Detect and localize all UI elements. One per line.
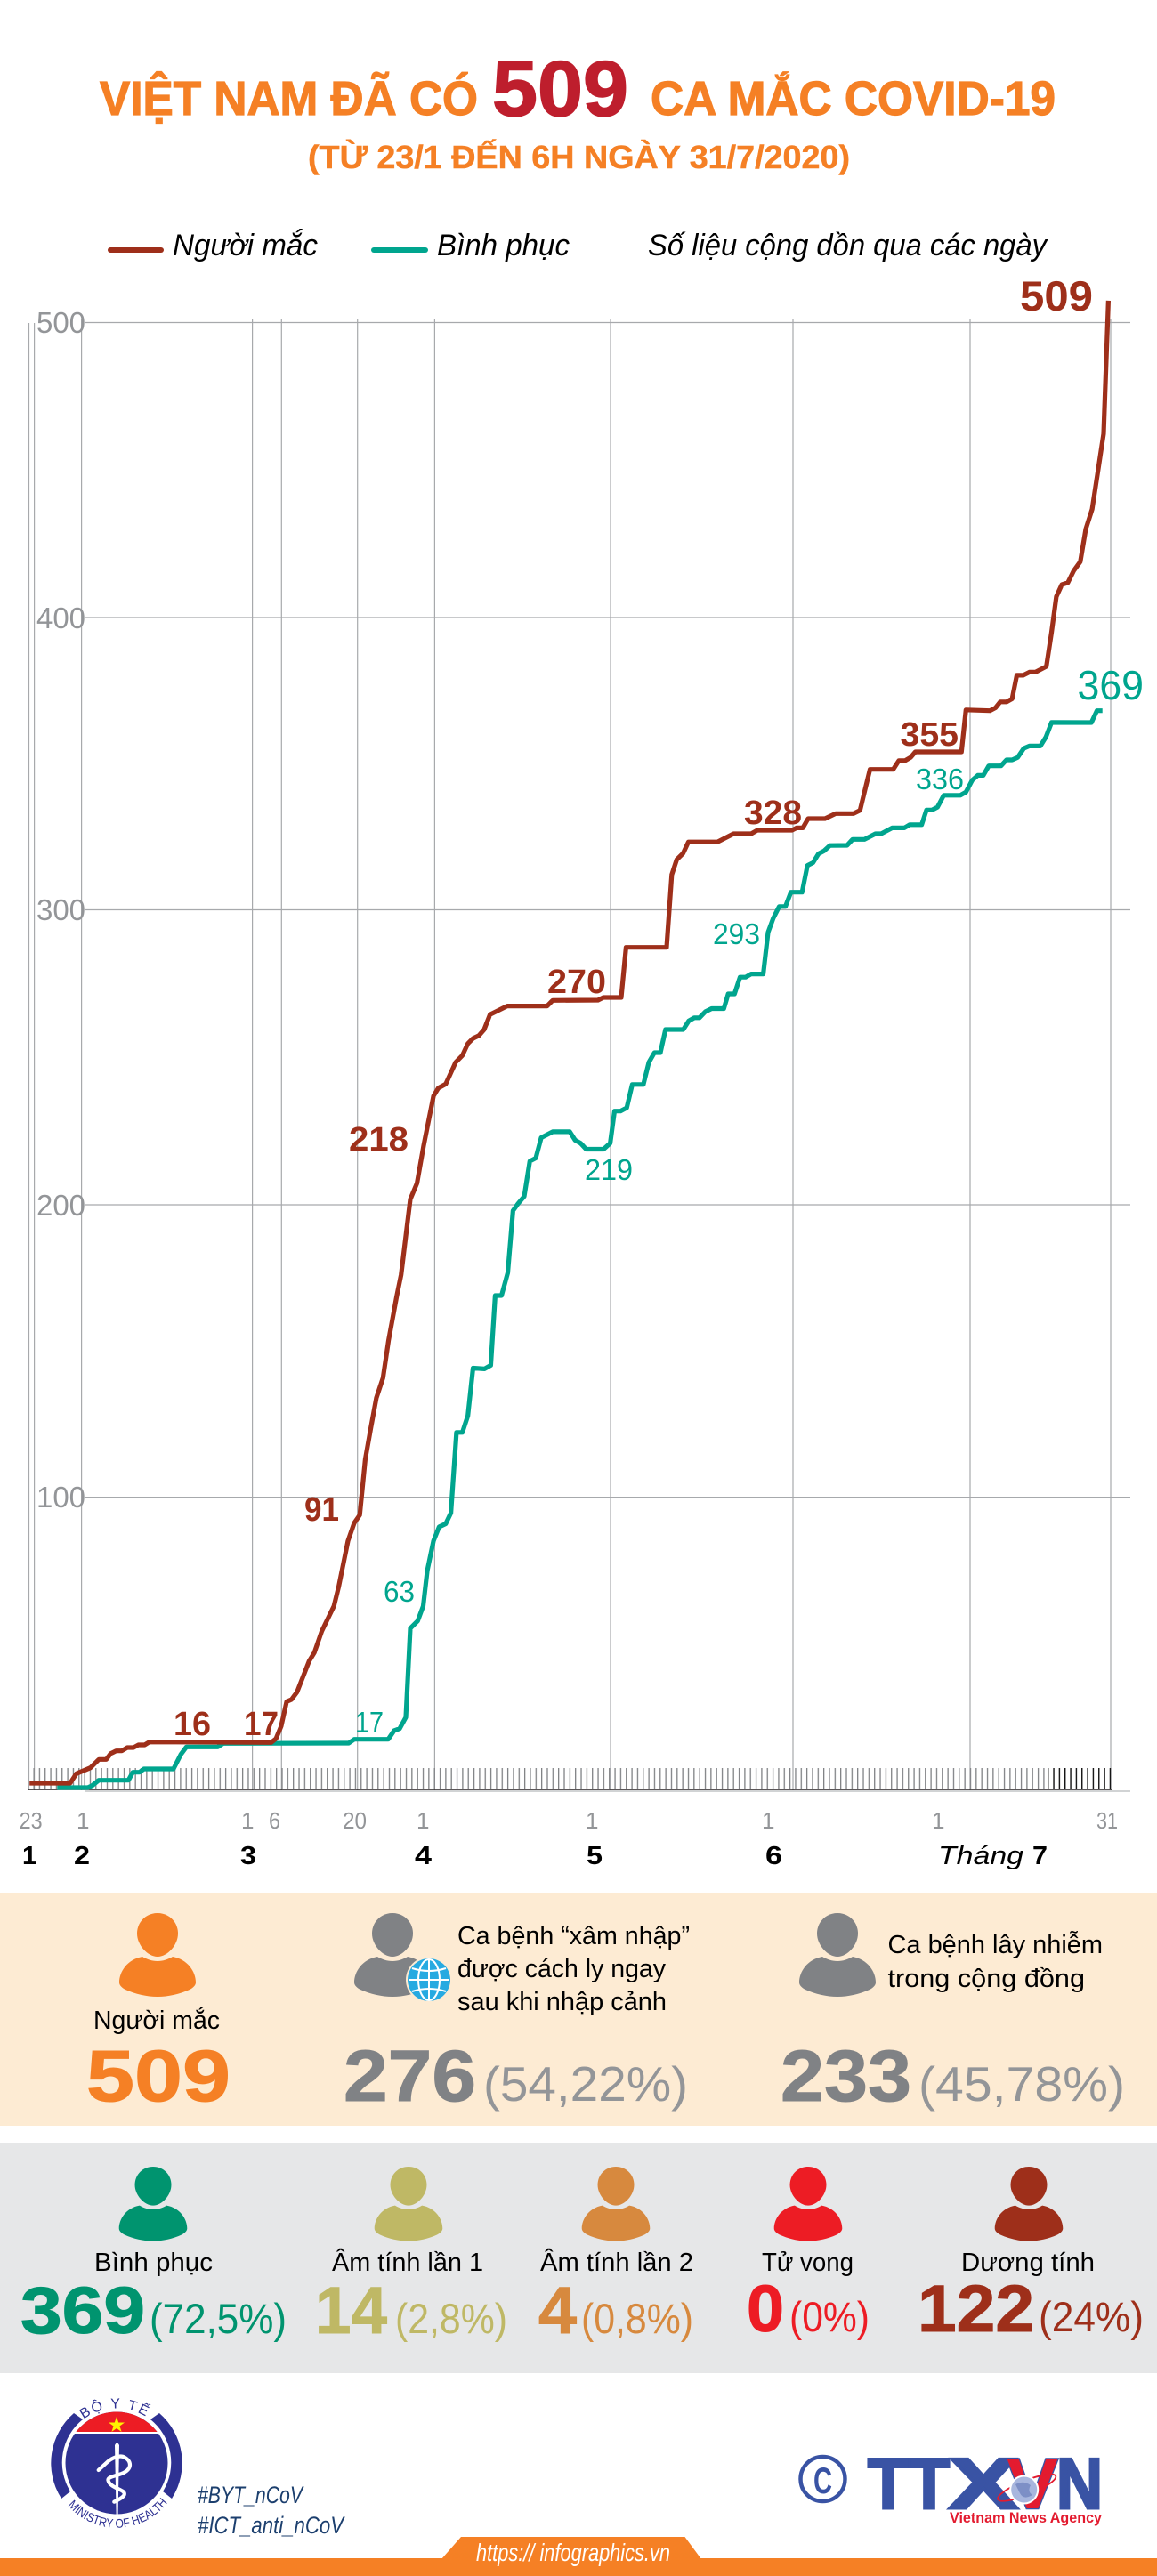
- stat: recovered: (72,5%): [150, 2295, 287, 2342]
- icon: imported case person with globe: [354, 1913, 452, 2003]
- agency name: Vietnam News Agency: [950, 2509, 1103, 2526]
- copyright mark: [801, 2457, 846, 2501]
- number: 233 community: 233: [781, 2036, 911, 2117]
- data labels: infected: 509: [1020, 272, 1093, 319]
- x axis month labels: 1: [22, 1842, 36, 1870]
- x axis day labels: [20, 1807, 1118, 1834]
- title: big number 509: 509: [492, 44, 628, 133]
- footer url: https:// infographics.vn: [476, 2539, 670, 2566]
- agency wordmark: [868, 2444, 1103, 2524]
- stat: recovered: 369: [20, 2273, 145, 2347]
- data labels: recovered: 63: [384, 1575, 415, 1608]
- title: trailing text: CA MẮC COVID-19: [651, 71, 1056, 125]
- x axis day labels: 20: [343, 1807, 367, 1834]
- x axis day labels: 31: [1096, 1807, 1118, 1834]
- number: 276 imported: [344, 2036, 688, 2117]
- title: lead text: VIỆT NAM ĐÃ CÓ: [100, 71, 478, 125]
- agency wordmark: V: [1007, 2444, 1058, 2524]
- stat: recovered: [20, 2167, 287, 2347]
- data labels: recovered: 369: [1077, 662, 1144, 708]
- hashtags: #ICT_anti_nCoV: [198, 2512, 345, 2539]
- x axis day labels: 1: [417, 1807, 429, 1834]
- stat: deaths: 0: [747, 2272, 784, 2346]
- data labels: infected: [174, 272, 1093, 1743]
- subtitle: (TỪ 23/1 ĐẾN 6H NGÀY 31/7/2020): [308, 138, 850, 175]
- legend: [110, 229, 1048, 262]
- copyright mark: C: [813, 2459, 832, 2501]
- data labels: recovered: 219: [585, 1153, 633, 1186]
- y axis labels: 300: [36, 893, 85, 926]
- text: imported cases: được cách ly ngay: [457, 1955, 666, 1983]
- stat: deaths: [747, 2167, 870, 2346]
- stat: still positive: [918, 2167, 1144, 2346]
- text: community cases: Ca bệnh lây nhiễm: [888, 1930, 1103, 1959]
- x axis day labels: 1: [762, 1807, 774, 1834]
- data labels: infected: 270: [547, 964, 606, 1001]
- data labels: recovered: 17: [355, 1706, 384, 1739]
- x axis month labels: 4: [415, 1842, 432, 1870]
- stat: still positive: 122: [918, 2272, 1034, 2346]
- x axis day labels: 1: [241, 1807, 254, 1834]
- data labels: recovered: 293: [713, 917, 760, 950]
- panel: treatment status: [0, 2143, 1157, 2373]
- y axis labels: 500: [36, 306, 85, 339]
- data labels: infected: 91: [304, 1491, 339, 1529]
- data labels: infected: 218: [349, 1121, 409, 1159]
- data labels: recovered: [355, 662, 1144, 1739]
- recovered cases line: [57, 711, 1103, 1788]
- x axis month labels: 2: [74, 1842, 90, 1870]
- x axis day labels: 1: [77, 1807, 89, 1834]
- agency wordmark: TT: [868, 2444, 950, 2524]
- text: imported cases: sau khi nhập cảnh: [457, 1988, 667, 2016]
- icon: community case person: [799, 1913, 876, 1997]
- text: community cases: trong cộng đồng: [888, 1965, 1085, 1993]
- y axis labels: 100: [36, 1481, 85, 1514]
- line chart: [20, 272, 1144, 1870]
- stat: negative twice: (0,8%): [581, 2295, 693, 2342]
- text: imported cases: Ca bệnh “xâm nhập”: [457, 1922, 690, 1950]
- title: [100, 44, 1056, 133]
- infected cases line: [29, 301, 1108, 1783]
- stat: negative once: 14: [315, 2273, 387, 2347]
- x axis day labels: 6: [269, 1807, 280, 1834]
- logo: Ministry of Health: MINISTRY OF HEALTH: [68, 2498, 167, 2528]
- stat: negative twice: Âm tính lần 2: [540, 2248, 693, 2277]
- data labels: infected: 355: [901, 716, 959, 754]
- x axis month labels: 5: [587, 1842, 603, 1870]
- x axis month labels: [22, 1842, 1048, 1870]
- hashtags: [198, 2482, 345, 2539]
- x axis day labels: 23: [20, 1807, 43, 1834]
- number: 276 imported: 276: [344, 2036, 476, 2117]
- stat: deaths: Tử vong: [762, 2249, 854, 2277]
- footer bar: [0, 2537, 1157, 2576]
- number: 276 imported: (54,22%): [483, 2056, 688, 2112]
- data labels: infected: 328: [744, 795, 802, 832]
- data labels: recovered: 336: [916, 763, 964, 795]
- stat: still positive: Dương tính: [961, 2249, 1095, 2277]
- agency wordmark: N: [1056, 2444, 1103, 2524]
- legend: recovered line: [374, 247, 425, 253]
- x axis day labels: 1: [586, 1807, 598, 1834]
- data labels: infected: 17: [244, 1706, 279, 1743]
- y axis labels: 200: [36, 1189, 85, 1222]
- y axis labels: [36, 306, 85, 1514]
- stat: deaths: (0%): [789, 2293, 870, 2340]
- number: 509: 509: [86, 2036, 231, 2117]
- logo: Ministry of Health: [51, 2398, 182, 2528]
- stat: negative once: Âm tính lần 1: [332, 2248, 483, 2277]
- x axis day labels: 1: [932, 1807, 944, 1834]
- x axis month labels: 6: [765, 1842, 782, 1870]
- legend: note: Số liệu cộng dồn qua các ngày: [648, 229, 1048, 262]
- text: imported cases: [457, 1922, 690, 2016]
- data labels: infected: 16: [174, 1706, 211, 1743]
- stat: negative twice: [538, 2167, 693, 2347]
- x axis month labels: 3: [240, 1842, 256, 1870]
- legend: infected label: Người mắc: [173, 229, 318, 262]
- y axis labels: 400: [36, 602, 85, 634]
- legend: infected line: [110, 247, 161, 253]
- x axis month labels: Tháng: [938, 1842, 1024, 1870]
- axis day ticks: [28, 1768, 1130, 1791]
- stat: still positive: (24%): [1039, 2293, 1144, 2340]
- agency wordmark: X: [949, 2444, 1018, 2524]
- text: community cases: [888, 1930, 1103, 1993]
- number: 233 community: [781, 2036, 1125, 2117]
- label: infected: Người mắc: [93, 2006, 220, 2035]
- panel: case origin: [0, 1893, 1157, 2126]
- logo: TTXVN copyright: [801, 2444, 1103, 2526]
- stat: negative twice: 4: [538, 2273, 577, 2347]
- stat: negative once: (2,8%): [395, 2295, 507, 2342]
- icon: infected person: [119, 1913, 196, 1997]
- stat: negative once: [315, 2167, 507, 2347]
- number: 233 community: (45,78%): [918, 2056, 1125, 2112]
- logo: Ministry of Health: BỘ Y TẾ: [79, 2398, 151, 2419]
- stat: recovered: Bình phục: [94, 2249, 213, 2277]
- x axis month labels: 7: [1032, 1842, 1048, 1870]
- legend: recovered label: Bình phục: [437, 229, 570, 262]
- hashtags: #BYT_nCoV: [198, 2482, 304, 2508]
